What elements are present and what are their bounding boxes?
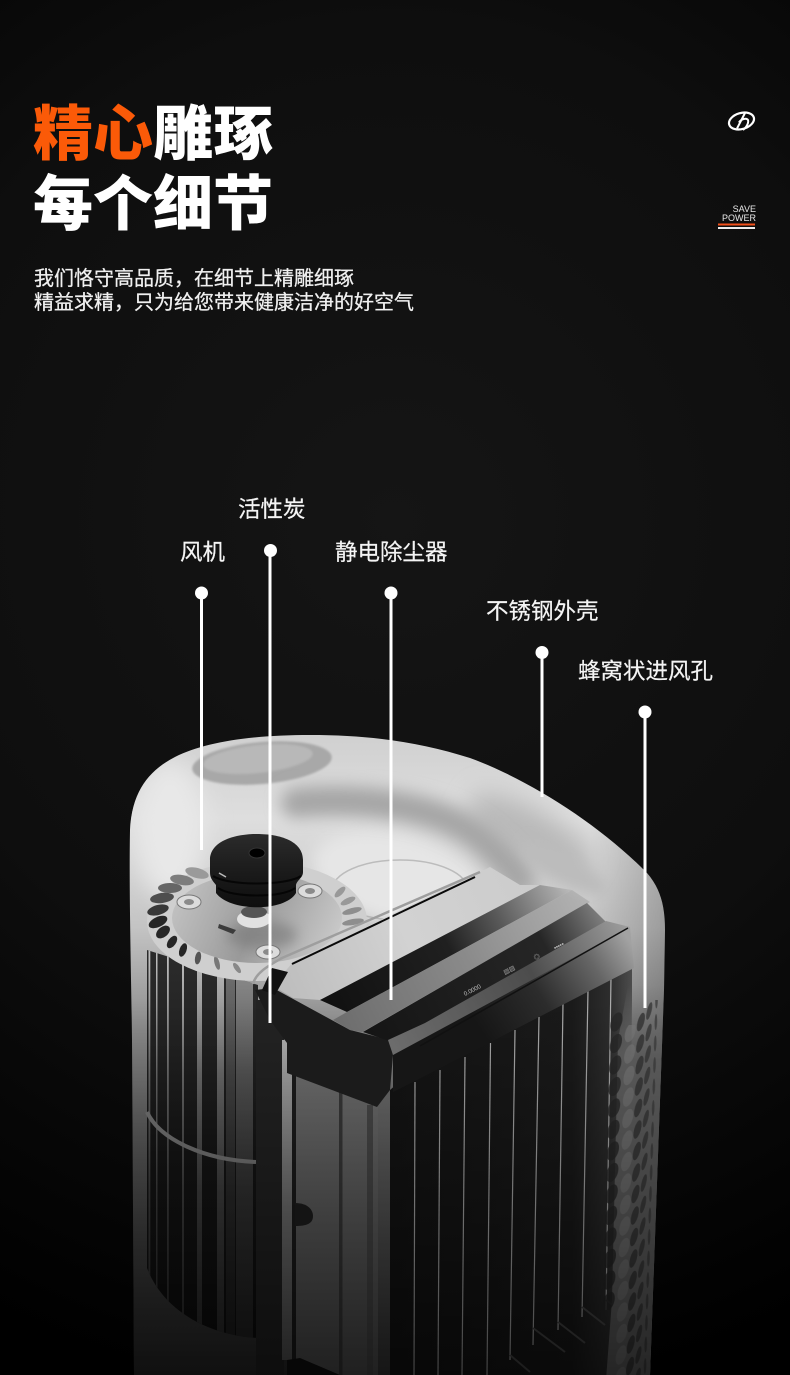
fin assembly: [390, 955, 632, 1375]
third rail: [388, 921, 630, 1055]
save power badge: [718, 204, 756, 229]
tiny label marks on rail: ◎: [533, 953, 541, 962]
tiny label marks on rail: [463, 942, 565, 998]
subtitle text block: [34, 267, 414, 314]
callout: 不锈钢外壳: [486, 599, 599, 797]
activated carbon filter panel: [296, 1092, 378, 1375]
fan top ring: [146, 861, 367, 981]
small bracket: [218, 924, 236, 934]
callout: 风机: [180, 540, 226, 850]
tiny label marks on rail: ▪▪▪▪▪: [553, 942, 565, 952]
frosted outer shell: [120, 730, 680, 1375]
motor plate: [172, 873, 342, 963]
air purifier product illustration: [120, 730, 680, 1375]
callout: 活性炭: 活性炭: [238, 497, 306, 522]
save power badge: SAVE: [733, 204, 756, 214]
title: 精心雕琢: [33, 101, 273, 168]
subtitle text block: 我们恪守高品质，在细节上精雕细琢: [34, 267, 354, 290]
lower body shading: [132, 1030, 662, 1375]
filter side strip: [282, 1040, 292, 1360]
filter top rails: [253, 832, 634, 1107]
stepped fin bottoms: [510, 1300, 606, 1372]
carry handle shadow: [296, 801, 520, 880]
black rubber motor mount: [210, 834, 303, 907]
front band: [393, 927, 634, 1092]
dark block under rails: [255, 988, 393, 1107]
subtitle text block: 精益求精，只为给您带来健康洁净的好空气: [34, 291, 414, 314]
title: 每个细节: [33, 171, 273, 238]
title: [33, 101, 273, 238]
metal corner post: [378, 1220, 390, 1375]
save power badge: POWER: [722, 213, 756, 223]
second rail: [333, 890, 590, 1032]
blower drum: [140, 950, 260, 1350]
first rail: [273, 867, 540, 1000]
soft shading on shell top: [130, 754, 593, 924]
dark channel two: [363, 903, 606, 1042]
callout: 不锈钢外壳: 不锈钢外壳: [486, 599, 599, 624]
brand logo icon: [727, 110, 756, 132]
transparent ring detail: [332, 860, 468, 920]
tiny label marks on rail: 0.0000: [463, 984, 483, 998]
callout: 蜂窝状进风孔: [578, 659, 713, 1008]
motor shaft: [237, 910, 271, 928]
callout: 风机: 风机: [180, 540, 226, 565]
callout: 蜂窝状进风孔: 蜂窝状进风孔: [578, 659, 713, 684]
screws: [177, 884, 322, 959]
tiny label marks on rail: ▨▨: [503, 965, 517, 977]
honeycomb air inlet: [605, 1000, 663, 1375]
frosted fade over rail ends: [516, 832, 614, 904]
dark centre column: [256, 1000, 284, 1375]
callout: 静电除尘器: [335, 540, 448, 1000]
control panel window: [192, 740, 332, 786]
callout: 活性炭: [238, 497, 306, 1023]
panel bottom bracket: [287, 1358, 340, 1375]
callout: 静电除尘器: 静电除尘器: [335, 540, 448, 565]
dark channel one: [320, 885, 572, 1012]
